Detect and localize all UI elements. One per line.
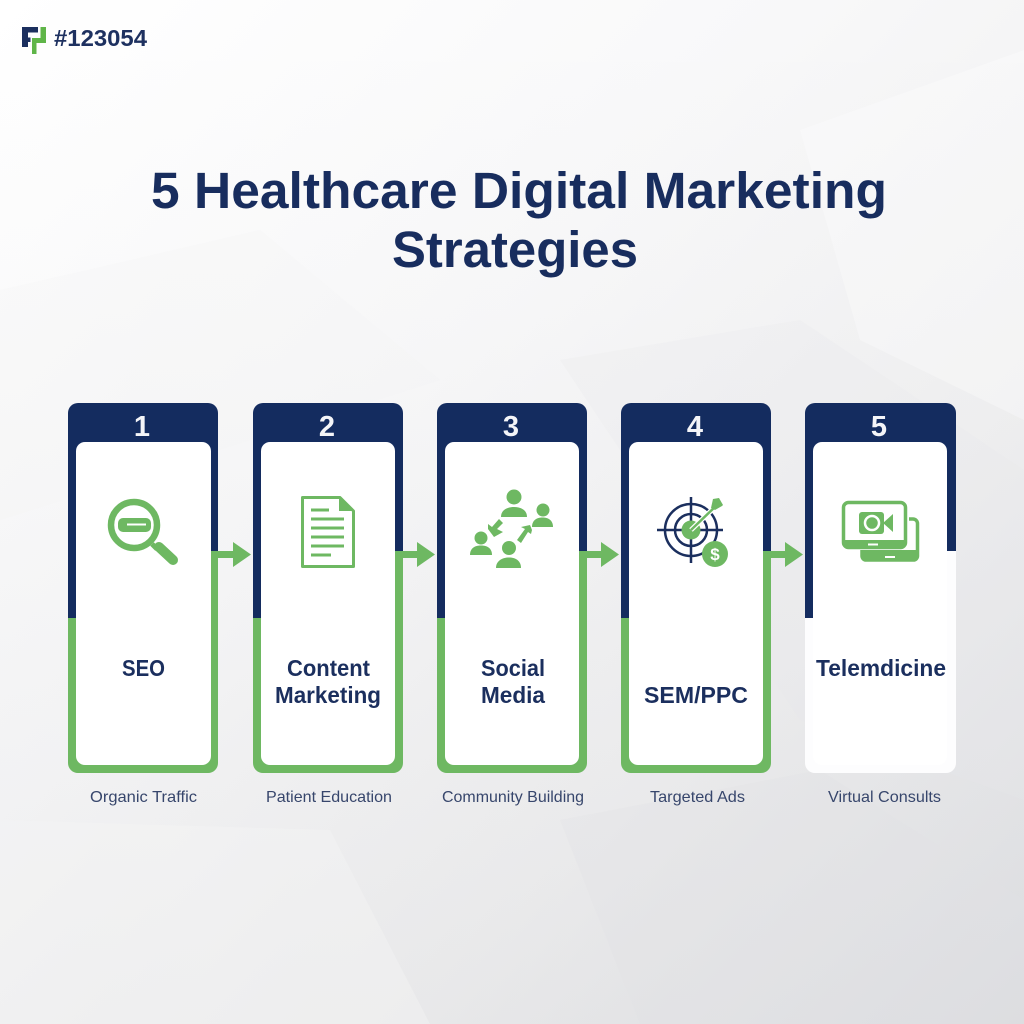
heading: Content Marketing [275, 655, 381, 708]
heading: SEO: SEO [122, 655, 165, 681]
logo [22, 25, 147, 54]
heading: Content Marketing: Content [287, 655, 370, 681]
panel: step 4 SEM/PPC [621, 403, 771, 773]
logo mark [22, 27, 46, 54]
panel: step 2 Content Marketing [253, 403, 403, 773]
icon: community people with arrows [470, 490, 553, 568]
icon: magnifying glass [111, 502, 173, 560]
panel: step 5 Telemedicine [805, 403, 956, 773]
icon: document [302, 497, 355, 566]
arrow 3 to 4 [579, 542, 619, 570]
icon: target with arrow and dollar: $ [710, 545, 720, 564]
heading: Content Marketing: Marketing [275, 682, 381, 708]
arrow 2 to 3 [395, 542, 435, 570]
title: 5 Healthcare Digital Marketing [151, 162, 887, 219]
panel: step 3 Social Media [437, 403, 587, 773]
title [151, 162, 887, 278]
heading: Social Media: Social [481, 655, 545, 681]
step number 5: 5 [871, 411, 887, 443]
heading: Telemdicine: Telemdicine [816, 655, 946, 681]
icon: target with arrow and dollar [657, 497, 728, 567]
panel: step 1 SEO [68, 403, 218, 773]
arrow 1 to 2 [211, 542, 251, 570]
caption: Organic Traffic: Organic Traffic [90, 789, 197, 806]
heading: Social Media [481, 655, 545, 708]
step number 1: 1 [134, 411, 150, 443]
heading: SEM/PPC: SEM/PPC [644, 682, 748, 708]
step number 2: 2 [319, 411, 335, 443]
title: Strategies [392, 221, 638, 278]
arrow 4 to 5 [763, 542, 803, 570]
icon: video call screens [843, 502, 918, 561]
step number 3: 3 [503, 411, 519, 443]
logo text: #123054 [54, 25, 147, 51]
heading: Social Media: Media [481, 682, 545, 708]
caption: Patient Education: Patient Education [266, 789, 392, 806]
caption: Community Building: Community Building [442, 789, 584, 806]
caption: Virtual Consults: Virtual Consults [828, 789, 941, 806]
caption: Targeted Ads: Targeted Ads [650, 789, 745, 806]
step number 4: 4 [687, 411, 703, 443]
